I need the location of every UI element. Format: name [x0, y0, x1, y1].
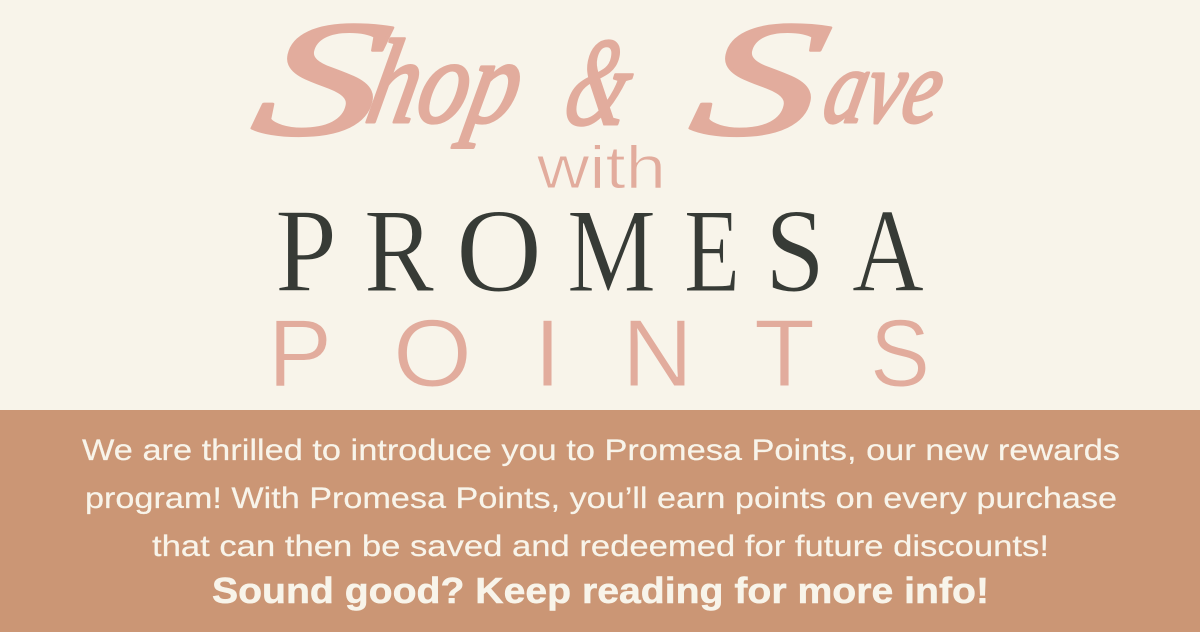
- title: Shop & Save: ave: [815, 28, 955, 145]
- brand name: PROMESA: E: [684, 184, 740, 317]
- brand name: PROMESA: O: [456, 184, 542, 317]
- brand name: PROMESA: A: [852, 184, 924, 317]
- body text: program! With Promesa Points, you’ll earn points on every purchase: [85, 482, 1117, 515]
- title: Shop & Save: &: [555, 13, 646, 152]
- subtitle: with: with: [536, 134, 666, 201]
- body text: We are thrilled to introduce you to Promesa Points, our new rewards: [82, 434, 1120, 467]
- panel: description band: [0, 410, 1200, 632]
- brand name: POINTS: O: [393, 300, 472, 407]
- brand name: POINTS: T: [754, 300, 815, 407]
- brand name: PROMESA: R: [364, 184, 434, 317]
- call to action: Sound good? Keep reading for more info!: [212, 570, 989, 611]
- brand name: POINTS: P: [268, 300, 332, 407]
- brand name: PROMESA: S: [765, 184, 825, 317]
- body text: that can then be saved and redeemed for future discounts!: [152, 530, 1049, 563]
- brand name: POINTS: S: [870, 300, 930, 407]
- brand name: PROMESA: M: [567, 184, 656, 317]
- brand name: POINTS: I: [534, 300, 561, 407]
- body text: [82, 434, 1120, 563]
- brand name: POINTS: N: [622, 300, 693, 407]
- brand name: PROMESA: P: [275, 184, 337, 317]
- title: Shop & Save: hop: [357, 16, 536, 149]
